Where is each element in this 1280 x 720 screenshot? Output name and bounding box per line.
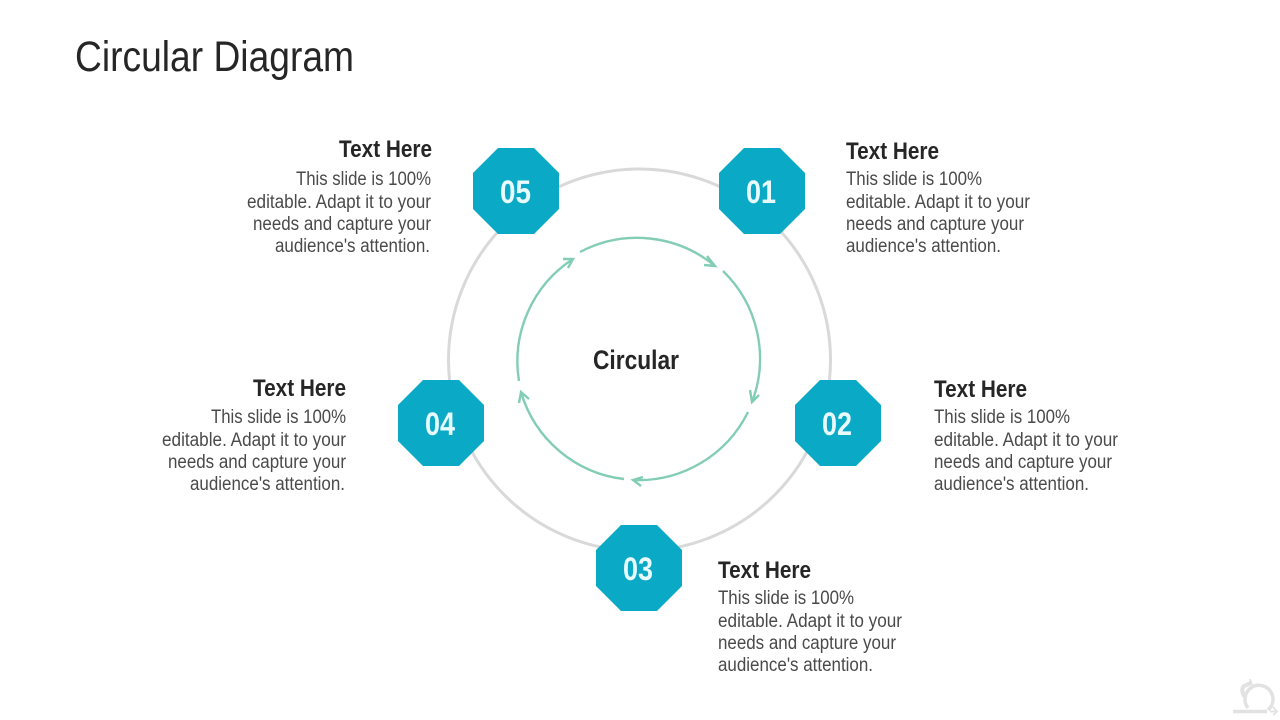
arrow: lower left arc — [519, 392, 624, 479]
text block 05: This slide is 100% — [296, 169, 431, 190]
arrow: right arc — [723, 271, 760, 402]
text block 04: Text Here — [253, 375, 346, 402]
text block 02: This slide is 100% — [934, 407, 1070, 428]
text block 03: editable. Adapt it to your — [718, 611, 903, 632]
step 04 badge: 04 — [425, 406, 455, 442]
text block 03 — [718, 557, 903, 676]
arrow: left arc — [517, 259, 573, 381]
step 03 badge — [596, 525, 682, 611]
step 05 badge — [473, 148, 559, 234]
text block 03: audience's attention. — [718, 655, 873, 676]
step 05 badge: 05 — [500, 174, 531, 210]
step 01 badge: 01 — [746, 174, 776, 210]
step 02 badge: 02 — [822, 406, 852, 442]
text block 05: needs and capture your — [253, 214, 432, 235]
text block 03: This slide is 100% — [718, 588, 854, 609]
step 03 badge: 03 — [623, 551, 653, 587]
text block 01: needs and capture your — [846, 214, 1025, 235]
text block 02 — [934, 376, 1119, 495]
text block 03: Text Here — [718, 557, 811, 584]
text block 01: audience's attention. — [846, 236, 1001, 257]
text block 04: needs and capture your — [168, 452, 347, 473]
text block 04: This slide is 100% — [211, 407, 346, 428]
step 04 badge — [398, 380, 484, 466]
text block 02: editable. Adapt it to your — [934, 430, 1119, 451]
text block 05: Text Here — [339, 136, 432, 163]
text block 04: editable. Adapt it to your — [162, 430, 347, 451]
step 02 badge — [795, 380, 881, 466]
text block 01: editable. Adapt it to your — [846, 192, 1031, 213]
text block 05: editable. Adapt it to your — [247, 192, 432, 213]
text block 02: Text Here — [934, 376, 1027, 403]
text block 04 — [162, 375, 347, 495]
text block 03: needs and capture your — [718, 633, 897, 654]
center label: Circular — [593, 345, 679, 375]
text block 01: Text Here — [846, 138, 939, 165]
arrow: top arc — [580, 238, 715, 266]
text block 02: needs and capture your — [934, 452, 1113, 473]
step 01 badge — [719, 148, 805, 234]
text block 05 — [247, 136, 432, 257]
title: Circular Diagram — [75, 33, 354, 81]
outer ring — [448, 169, 830, 551]
text block 04: audience's attention. — [190, 474, 345, 495]
arrow: lower right arc — [633, 412, 748, 486]
icon: corner logo — [1233, 679, 1277, 715]
text block 02: audience's attention. — [934, 474, 1089, 495]
inner cycle arrows — [517, 238, 760, 486]
text block 01 — [846, 138, 1031, 257]
text block 01: This slide is 100% — [846, 169, 982, 190]
text block 05: audience's attention. — [275, 236, 430, 257]
